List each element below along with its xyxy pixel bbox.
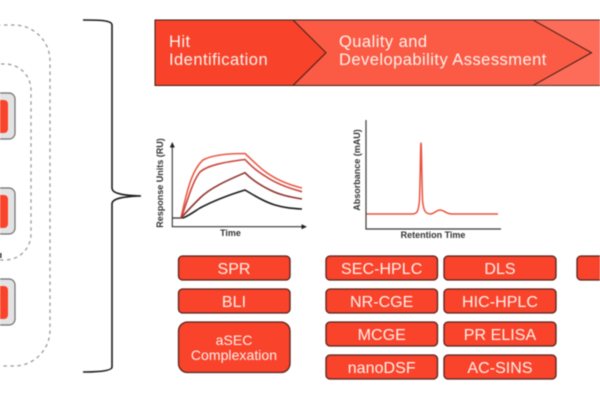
x-axis label: Retention Time [401,230,465,240]
axes [172,146,304,227]
arrowheads [170,142,307,229]
button: AC-SINS: AC-SINS [467,360,533,377]
panel: quality and developability assays [326,256,556,379]
panel: nested sample groups [0,25,50,366]
button: NR-CGE [326,289,438,313]
y-axis label: Response Units (RU) [155,138,165,228]
heading: hit identification: Hit [169,33,191,51]
button: PR ELISA: PR ELISA [464,327,536,344]
button: HIC-HPLC: HIC-HPLC [462,294,538,311]
button: MCGE [326,322,438,346]
inner dashed group outline [0,64,31,260]
panel: process chevrons [155,20,600,86]
chart: chromatogram [352,120,501,240]
icon: sample tile 1 [0,93,15,139]
button: SEC-HPLC [326,256,438,280]
icon: sample tile 3 [0,279,15,325]
button: BLI: BLI [222,294,246,311]
button: aSEC complexation: aSEC [216,332,252,348]
button: cropped next-stage assay [577,256,600,280]
button: DLS [444,256,556,280]
button: DLS: DLS [484,261,516,278]
chevron: quality and developability [280,20,592,86]
cropped label fragment [0,253,2,258]
curly brace [83,20,141,372]
button: nanoDSF [326,355,438,379]
heading: hit identification: Identification [169,51,268,69]
chevron: next stage [520,20,600,86]
trace [366,143,498,214]
panel: hit identification assays [178,256,290,372]
button: SPR: SPR [217,261,251,278]
y-axis label: Absorbance (mAU) [352,129,362,211]
heading: quality and developability assessment: Developability Assessment [339,51,547,69]
button: aSEC complexation: Complexation [191,347,277,363]
x-axis label: Time [220,228,241,238]
button: nanoDSF: nanoDSF [348,360,416,377]
chart: binding sensorgram [155,138,307,238]
button: SEC-HPLC: SEC-HPLC [341,261,422,278]
baseline [172,217,183,219]
button: MCGE: MCGE [358,327,406,344]
button: aSEC complexation [178,322,290,372]
button: NR-CGE: NR-CGE [350,294,413,311]
axes [366,120,501,229]
outer dashed group outline [0,25,50,366]
chevron: hit identification [155,20,326,86]
heading: quality and developability assessment: Quality and [339,33,428,51]
button: AC-SINS [444,355,556,379]
curves [181,154,302,218]
button: PR ELISA [444,322,556,346]
icon: sample tile 2 [0,188,15,234]
button: HIC-HPLC [444,289,556,313]
